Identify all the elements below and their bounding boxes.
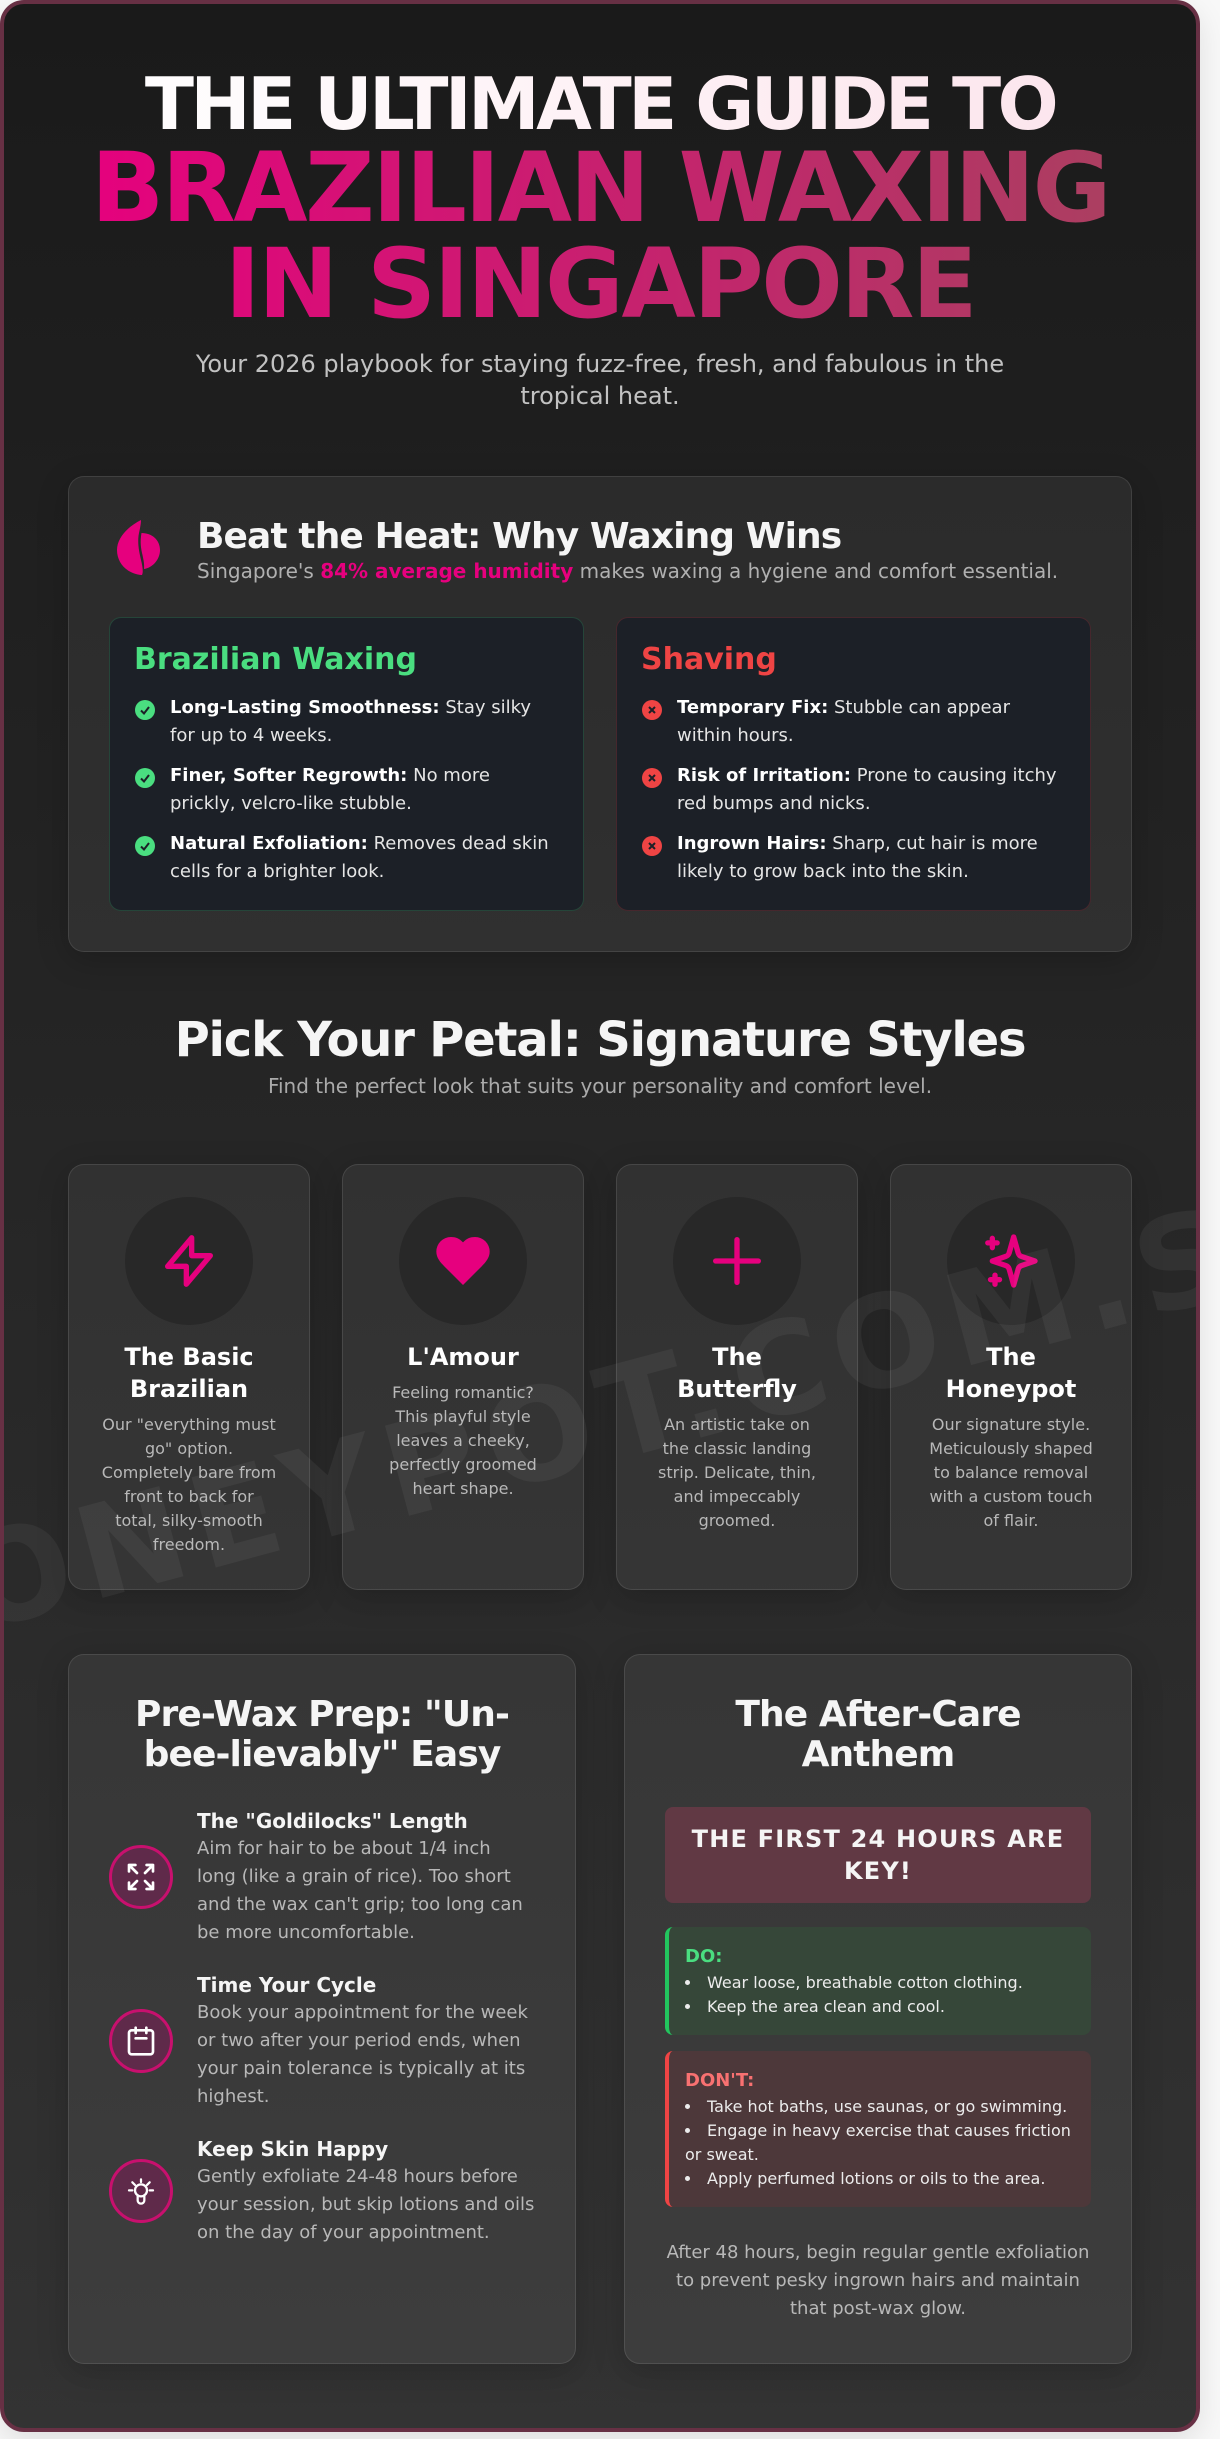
step: skin [109, 2137, 534, 2243]
comparison [109, 617, 1091, 911]
card: brazilian waxing [109, 617, 584, 911]
icon: lightning bolt [125, 1197, 253, 1325]
icon: calendar [109, 2009, 173, 2073]
card: the butterfly: An artistic take on the classic landing strip. Delicate, thin, and impeccably groomed. [658, 1415, 816, 1530]
panel: pre-wax prep [68, 1654, 576, 2364]
panel: beat the heat [68, 476, 1132, 952]
panel heading: Beat the Heat: Why Waxing Wins [197, 516, 841, 557]
callout: don't: Apply perfumed lotions or oils to the area. [707, 2169, 1045, 2188]
card: the basic brazilian [68, 1164, 310, 1590]
panel: after-care [624, 1654, 1132, 2364]
card: the butterfly [616, 1164, 858, 1590]
card: l'amour: Feeling romantic? This playful style leaves a cheeky, perfectly groomed heart shape. [389, 1383, 537, 1498]
signature style cards [68, 1164, 1132, 1590]
step: cycle: Book your appointment for the week or two after your period ends, when your pain tolerance is typically at its highest. [197, 2002, 528, 2107]
step: length [109, 1809, 523, 1943]
card: brazilian waxing: Natural Exfoliation: Removes dead skin cells for a brighter look. [170, 833, 549, 882]
step: skin: Gently exfoliate 24-48 hours before your session, but skip lotions and oils on the day of your appointment. [197, 2166, 534, 2243]
two column panels [68, 1654, 1132, 2364]
callout: do [665, 1927, 1091, 2035]
panel: pre-wax prep: Pre-Wax Prep: "Un-bee-lievably" Easy [135, 1694, 509, 1775]
callout: don't: DON'T: [685, 2070, 754, 2091]
card: the butterfly: The Butterfly [677, 1343, 797, 1403]
card: the honeypot: The Honeypot [946, 1343, 1076, 1403]
card: shaving: Shaving [641, 642, 777, 677]
card: the honeypot: Our signature style. Meticulously shaped to balance removal with a custom touch of flair. [929, 1415, 1093, 1530]
card: brazilian waxing: Long-Lasting Smoothness: Stay silky for up to 4 weeks. [170, 697, 531, 746]
section heading: signature styles: Pick Your Petal: Signature Styles [175, 1012, 1025, 1068]
title: THE ULTIMATE GUIDE TO [145, 62, 1055, 146]
card: brazilian waxing: Finer, Softer Regrowth: No more prickly, velcro-like stubble. [170, 765, 490, 814]
card: the basic brazilian: The Basic Brazilian [124, 1343, 254, 1403]
title: IN SINGAPORE [225, 228, 975, 340]
callout: don't: Engage in heavy exercise that causes friction or sweat. [685, 2121, 1071, 2164]
card: shaving: Temporary Fix: Stubble can appear within hours. [677, 697, 1010, 746]
card: brazilian waxing: Brazilian Waxing [134, 642, 417, 677]
step: length: Aim for hair to be about 1/4 inch long (like a grain of rice). Too short and the wax can't grip; too long can be more uncomfortable. [197, 1838, 523, 1943]
title: BRAZILIAN WAXING [91, 132, 1109, 244]
icon: plus [673, 1197, 801, 1325]
section heading: signature styles [175, 1012, 1025, 1098]
callout: don't: Take hot baths, use saunas, or go swimming. [707, 2097, 1067, 2116]
icon: sparkles [947, 1197, 1075, 1325]
step: length: The "Goldilocks" Length [197, 1809, 468, 1833]
step: cycle [109, 1973, 528, 2107]
panel: after-care: The After-Care Anthem [735, 1694, 1021, 1775]
callout: do: Keep the area clean and cool. [707, 1997, 945, 2016]
callout: do: DO: [685, 1946, 722, 1967]
card: l'amour [342, 1164, 584, 1590]
section heading: signature styles: Find the perfect look that suits your personality and comfort level. [268, 1074, 932, 1098]
icon: expand arrows [109, 1845, 173, 1909]
panel heading: Singapore's 84% average humidity makes waxing a hygiene and comfort essential. [197, 559, 1058, 583]
closing note: After 48 hours, begin regular gentle exfoliation to prevent pesky ingrown hairs and maintain that post-wax glow. [667, 2242, 1089, 2319]
subtitle: Your 2026 playbook for staying fuzz-free, fresh, and fabulous in the tropical heat. [196, 350, 1004, 410]
icon: heart [399, 1197, 527, 1325]
callout: first 24 hours: THE FIRST 24 HOURS ARE KEY! [692, 1825, 1064, 1885]
card: shaving: Ingrown Hairs: Sharp, cut hair is more likely to grow back into the skin. [677, 833, 1038, 882]
card: the honeypot [890, 1164, 1132, 1590]
callout: don't [665, 2051, 1091, 2207]
card: shaving: Risk of Irritation: Prone to causing itchy red bumps and nicks. [677, 765, 1057, 814]
step: cycle: Time Your Cycle [197, 1973, 376, 1997]
callout: first 24 hours [665, 1807, 1091, 1903]
icon: petal [117, 520, 160, 575]
panel header [117, 516, 1058, 583]
card: the basic brazilian: Our "everything must go" option. Completely bare from front to back for total, silky-smooth freedom. [102, 1415, 276, 1554]
step: skin: Keep Skin Happy [197, 2137, 388, 2161]
title [91, 62, 1109, 340]
callout: do: Wear loose, breathable cotton clothing. [707, 1973, 1023, 1992]
card: shaving [616, 617, 1091, 911]
icon: light bulb [109, 2159, 173, 2223]
card: l'amour: L'Amour [407, 1343, 519, 1371]
panel heading [197, 516, 1058, 583]
